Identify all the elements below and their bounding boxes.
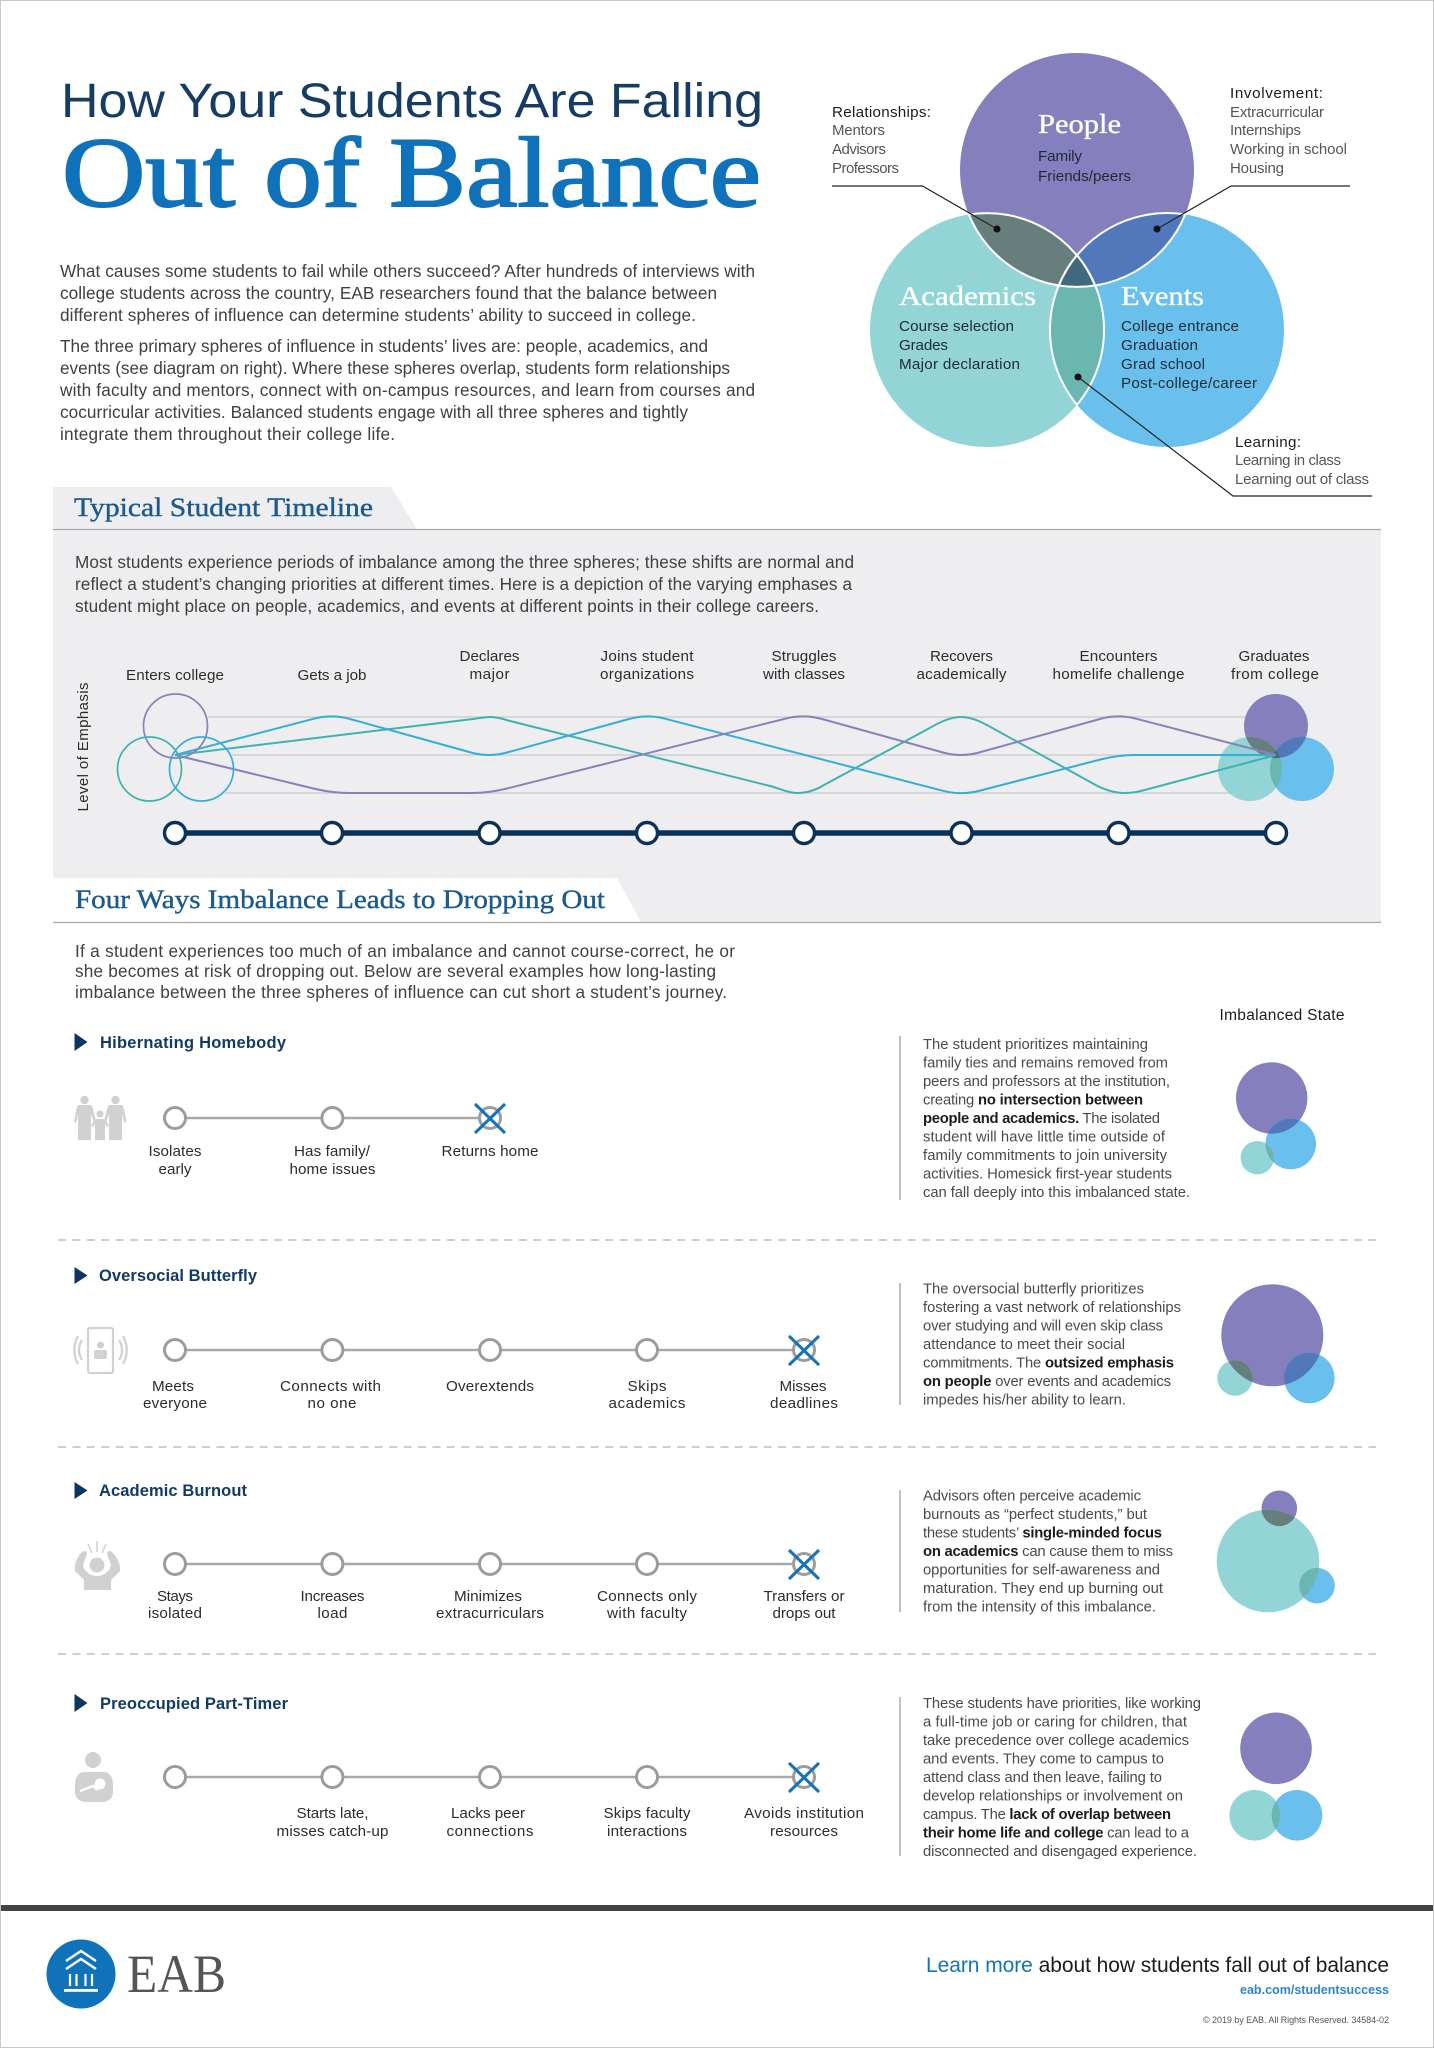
description: student will have little time outside of <box>923 1130 1166 1146</box>
event labels: Declares <box>460 648 520 665</box>
logo: EAB <box>46 1940 226 2008</box>
step labels: Connects with <box>280 1378 381 1395</box>
panel: oversocial butterfly <box>74 1267 1335 1412</box>
intro text: events (see diagram on right). Where these spheres overlap, students form relationships <box>60 358 730 378</box>
step labels: Transfers or <box>764 1588 844 1605</box>
profile title: Oversocial Butterfly <box>99 1267 258 1285</box>
events label <box>1121 280 1257 392</box>
step labels <box>148 1143 538 1178</box>
description <box>900 1036 1190 1201</box>
academics label: Academics <box>899 280 1036 311</box>
imbalance diagram <box>1217 1490 1335 1612</box>
overlap: center <box>1059 255 1095 287</box>
academics label <box>899 280 1036 373</box>
event labels: organizations <box>600 666 694 683</box>
circle: academics <box>870 213 1104 447</box>
four ways intro text: If a student experiences too much of an imbalance and cannot course-correct, he or <box>75 941 735 961</box>
description: family commitments to join university <box>923 1148 1168 1164</box>
timeline intro text: reflect a student’s changing priorities at different times. Here is a depiction of the varying emphases a <box>75 574 852 594</box>
description: and events. They come to campus to <box>923 1752 1164 1768</box>
icon: phone <box>74 1328 127 1373</box>
description: Advisors often perceive academic <box>923 1489 1142 1505</box>
axis label: Level of Emphasis <box>75 682 92 812</box>
callout: relationships <box>832 104 1000 232</box>
callout: relationships: Advisors <box>832 141 886 158</box>
profile title: Preoccupied Part-Timer <box>100 1695 289 1713</box>
step labels: load <box>318 1605 348 1622</box>
description: The student prioritizes maintaining <box>923 1037 1148 1053</box>
callout: relationships: Professors <box>832 160 899 177</box>
callout: involvement: Internships <box>1230 122 1301 139</box>
step labels: Isolates <box>148 1143 202 1160</box>
journey timeline <box>164 1763 819 1792</box>
journey timeline <box>164 1550 819 1579</box>
arrow <box>74 1482 88 1499</box>
description: peers and professors at the institution, <box>923 1074 1170 1090</box>
event labels: Struggles <box>772 648 837 665</box>
intro text <box>59 261 755 444</box>
step labels: connections <box>446 1823 534 1840</box>
intro text: with faculty and mentors, connect with on-campus resources, and learn from courses and <box>59 380 755 400</box>
panel: typical student timeline <box>53 487 1381 922</box>
emphasis lines chart <box>175 716 1276 793</box>
description <box>900 1696 1201 1860</box>
intro text: different spheres of influence can determine students’ ability to succeed in college. <box>60 305 696 325</box>
step labels: Avoids institution <box>744 1805 864 1822</box>
events label: Grad school <box>1121 356 1205 373</box>
callout: relationships: Relationships: <box>832 104 931 121</box>
description: people and academics. The isolated <box>923 1111 1160 1127</box>
title: Out of Balance <box>62 117 761 228</box>
step labels <box>143 1378 838 1412</box>
step labels: drops out <box>772 1605 836 1622</box>
graduation circles <box>1218 694 1334 801</box>
description: attend class and then leave, failing to <box>923 1770 1162 1786</box>
events label: College entrance <box>1121 318 1239 335</box>
events label: Graduation <box>1121 337 1198 354</box>
step labels: Skips faculty <box>604 1805 691 1822</box>
four ways intro text <box>75 941 735 1002</box>
description: campus. The lack of overlap between <box>923 1807 1171 1823</box>
heading: four ways: Four Ways Imbalance Leads to Dropping Out <box>75 884 606 914</box>
section tab: four ways <box>53 878 1381 922</box>
callout: relationships: Mentors <box>832 122 885 139</box>
events label: Events <box>1121 280 1204 311</box>
step labels: isolated <box>148 1605 202 1622</box>
call to action: Learn more about how students fall out of balance <box>926 1954 1389 1977</box>
profile title: Academic Burnout <box>99 1482 248 1500</box>
intro text: What causes some students to fail while others succeed? After hundreds of interviews with <box>60 261 755 281</box>
intro text: integrate them throughout their college life. <box>60 424 395 444</box>
callout: involvement: Involvement: <box>1230 85 1323 102</box>
description: creating no intersection between <box>923 1092 1143 1108</box>
step labels: resources <box>770 1823 838 1840</box>
icon: x mark <box>789 1763 819 1792</box>
description: These students have priorities, like working <box>923 1696 1201 1712</box>
callout: learning: Learning: <box>1235 434 1301 451</box>
line: events <box>175 716 1276 793</box>
step labels <box>148 1588 844 1622</box>
description: their home life and college can lead to a <box>923 1826 1190 1842</box>
event labels <box>126 648 1319 684</box>
people label: People <box>1038 108 1121 139</box>
academics label: Major declaration <box>899 356 1020 373</box>
heading: typical student timeline: Typical Student Timeline <box>74 492 373 522</box>
journey timeline <box>164 1104 505 1133</box>
description: over studying and will even skip class <box>923 1319 1163 1335</box>
event labels: Encounters <box>1080 648 1158 665</box>
description <box>900 1489 1173 1616</box>
call to action: eab.com/studentsuccess <box>1240 1983 1389 1997</box>
description: take precedence over college academics <box>923 1733 1189 1749</box>
step labels: Skips <box>628 1378 667 1395</box>
overlap: academics and events <box>1050 255 1104 405</box>
call to action: © 2019 by EAB. All Rights Reserved. 34584-02 <box>1203 2015 1389 2025</box>
description: on academics can cause them to miss <box>923 1544 1173 1560</box>
timeline intro text <box>75 552 854 616</box>
step labels: interactions <box>607 1823 687 1840</box>
academics label: Course selection <box>899 318 1014 335</box>
timeline intro text: Most students experience periods of imbalance among the three spheres; these shifts are normal and <box>75 552 854 572</box>
step labels: with faculty <box>606 1605 687 1622</box>
arrow <box>74 1267 88 1284</box>
description: commitments. The outsized emphasis <box>923 1356 1174 1372</box>
four ways intro text: she becomes at risk of dropping out. Below are several examples how long-lasting <box>75 961 716 981</box>
event labels: homelife challenge <box>1052 666 1184 683</box>
description: burnouts as “perfect students,” but <box>923 1507 1147 1523</box>
event labels: major <box>470 666 510 683</box>
venn diagram <box>832 53 1372 496</box>
step labels: Minimizes <box>454 1588 522 1605</box>
profile title: Hibernating Homebody <box>100 1034 287 1052</box>
step labels: Overextends <box>446 1378 534 1395</box>
step labels: Starts late, <box>296 1805 368 1822</box>
step labels: Increases <box>300 1588 365 1605</box>
intro text: cocurricular activities. Balanced students engage with all three spheres and tightly <box>60 402 688 422</box>
description: fostering a vast network of relationships <box>923 1300 1181 1316</box>
timeline axis <box>164 822 1286 844</box>
line: people <box>175 716 1276 793</box>
people label: Friends/peers <box>1038 168 1131 185</box>
call to action <box>926 1954 1389 2025</box>
timeline intro text: student might place on people, academics, and events at different points in their college careers. <box>75 596 819 616</box>
description: maturation. They end up burning out <box>923 1581 1163 1597</box>
step labels: Lacks peer <box>451 1805 525 1822</box>
step labels: early <box>158 1161 192 1178</box>
arrow <box>74 1694 88 1712</box>
icon: nursing parent <box>75 1752 113 1802</box>
four ways intro text: imbalance between the three spheres of influence can cut short a student’s journey. <box>75 982 727 1002</box>
icon: x mark <box>789 1336 819 1365</box>
description: can fall deeply into this imbalanced state. <box>923 1185 1190 1201</box>
arrow <box>74 1033 88 1051</box>
callout: involvement <box>1154 85 1350 232</box>
description: develop relationships or involvement on <box>923 1788 1183 1804</box>
callout: involvement: Working in school <box>1230 141 1347 158</box>
description: opportunities for self-awareness and <box>923 1563 1160 1579</box>
event labels: Recovers <box>930 648 993 665</box>
description: a full-time job or caring for children, that <box>923 1714 1187 1730</box>
event labels: Graduates <box>1238 648 1310 665</box>
journey timeline <box>164 1336 819 1365</box>
step labels: everyone <box>143 1395 207 1412</box>
description: family ties and remains removed from <box>923 1056 1168 1072</box>
icon: x mark <box>475 1104 505 1133</box>
callout: involvement: Extracurricular <box>1230 104 1324 121</box>
event labels: Gets a job <box>298 667 366 684</box>
step labels: no one <box>308 1395 356 1412</box>
description: disconnected and disengaged experience. <box>923 1844 1197 1860</box>
description: attendance to meet their social <box>923 1337 1125 1353</box>
imbalance diagram <box>1236 1062 1316 1174</box>
start circles <box>118 694 234 801</box>
description: impedes his/her ability to learn. <box>923 1393 1126 1409</box>
panel: hibernating homebody <box>74 1033 1316 1201</box>
step labels: academics <box>608 1395 686 1412</box>
people label: Family <box>1038 148 1082 165</box>
description: these students’ single-minded focus <box>923 1526 1162 1542</box>
event labels: with classes <box>762 666 845 683</box>
event labels: from college <box>1231 666 1319 683</box>
step labels: extracurriculars <box>436 1605 544 1622</box>
step labels <box>276 1805 864 1840</box>
step labels: Stays <box>157 1588 193 1605</box>
step labels: misses catch-up <box>276 1823 388 1840</box>
title: How Your Students Are Falling <box>61 75 763 128</box>
callout: learning: Learning out of class <box>1235 471 1369 488</box>
description: from the intensity of this imbalance. <box>923 1600 1156 1616</box>
logo: EAB: EAB <box>127 1944 226 2004</box>
footer <box>1 1905 1433 2025</box>
line: academics <box>175 717 1276 793</box>
overlap: people and events <box>1059 213 1185 287</box>
academics label: Grades <box>899 337 948 354</box>
icon: stressed person <box>75 1541 120 1590</box>
imbalance diagram <box>1217 1284 1335 1403</box>
title <box>61 75 763 228</box>
step labels: Connects only <box>597 1588 697 1605</box>
icon: family <box>74 1096 126 1140</box>
panel: academic burnout <box>74 1482 1335 1622</box>
step labels: deadlines <box>770 1395 838 1412</box>
step labels: home issues <box>290 1161 376 1178</box>
description <box>900 1282 1181 1409</box>
events label: Post-college/career <box>1121 375 1257 392</box>
step labels: Has family/ <box>294 1143 371 1160</box>
imbalance diagram <box>1229 1712 1322 1841</box>
circle: people <box>960 53 1194 287</box>
step labels: Returns home <box>442 1143 538 1160</box>
step labels: Meets <box>152 1378 194 1395</box>
event labels: academically <box>916 666 1007 683</box>
callout: learning <box>1074 374 1372 496</box>
heading: imbalanced state: Imbalanced State <box>1220 1007 1344 1024</box>
overlap: people and academics <box>969 213 1095 287</box>
section tab <box>53 487 417 529</box>
intro text: college students across the country, EAB researchers found that the balance between <box>60 283 717 303</box>
circle: events <box>1050 213 1284 447</box>
description: on people over events and academics <box>923 1374 1171 1390</box>
people label <box>1038 108 1131 185</box>
description: The oversocial butterfly prioritizes <box>923 1282 1144 1298</box>
callout: learning: Learning in class <box>1235 452 1341 469</box>
panel: preoccupied part-timer <box>74 1694 1322 1860</box>
description: activities. Homesick first-year students <box>923 1166 1172 1182</box>
step labels: Misses <box>780 1378 827 1395</box>
event labels: Enters college <box>126 667 224 684</box>
callout: involvement: Housing <box>1230 160 1284 177</box>
event labels: Joins student <box>600 648 694 665</box>
intro text: The three primary spheres of influence in students’ lives are: people, academics, and <box>60 336 708 356</box>
icon: x mark <box>789 1550 819 1579</box>
